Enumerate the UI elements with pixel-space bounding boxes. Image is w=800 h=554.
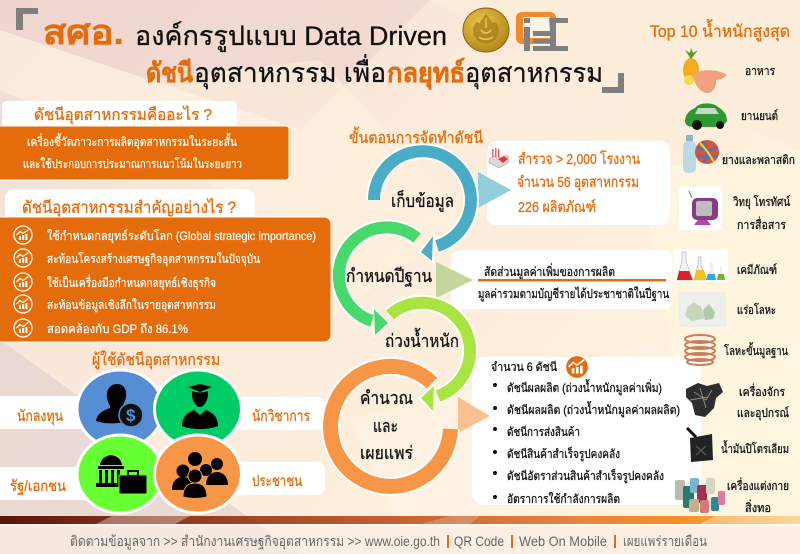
title line two: อุตสาหกรรม	[465, 58, 603, 90]
step 4 ring: calculate and publish	[331, 366, 450, 486]
footer	[0, 516, 800, 554]
panel: index users	[0, 350, 325, 513]
index list: อัตราการใช้กำลังการผลิต	[507, 492, 620, 506]
item: radio television and communication: การสื่อสาร	[737, 216, 786, 232]
item: non-metallic minerals	[679, 292, 776, 327]
title line two: อุตสาหกรรม เพื่อ	[194, 54, 386, 90]
step 4 ring: calculate and publish: เผยแพร่	[360, 443, 413, 463]
list text	[47, 229, 316, 336]
step 1 ring: collect data: เก็บข้อมูล	[391, 189, 454, 212]
step 4 ring: calculate and publish: คำนวณ	[360, 388, 413, 408]
item: rubber and plastics	[683, 135, 795, 173]
user: government and private sector: รัฐ/เอกชน	[10, 478, 66, 495]
formula divider	[478, 279, 666, 282]
list text: ใช้เป็นเครื่องมือกำหนดกลยุทธ์เชิงธุรกิจ	[47, 274, 216, 291]
heading: top 10: Top 10 น้ำหนักสูงสุด	[650, 19, 790, 42]
heading: why it matters	[5, 189, 255, 223]
arrow: pointer to index list	[458, 397, 490, 433]
heading: index process steps: ขั้นตอนการจัดทำดัชนี	[349, 126, 483, 147]
user: academic: นักวิชาการ	[252, 408, 310, 425]
step 2 ring: base year	[339, 227, 432, 338]
survey text: สำรวจ > 2,000 โรงงาน	[518, 150, 640, 168]
arrow: pointer to survey panel	[478, 172, 511, 208]
arrow: pointer to formula panel	[436, 262, 473, 298]
item: apparel and textiles: สิ่งทอ	[745, 499, 771, 515]
index list: ดัชนีผลผลิต (ถ่วงน้ำหนักมูลค่าเพิ่ม)	[507, 379, 662, 396]
panel: why the index matters	[0, 189, 331, 342]
footer bar	[0, 516, 800, 524]
corner bracket: top left	[16, 8, 38, 30]
index list: ดัชนีสินค้าสำเร็จรูปคงคลัง	[507, 446, 620, 462]
orange list block	[0, 217, 331, 342]
icons: bullet charts	[14, 226, 32, 337]
item: machinery and equipment: และอุปกรณ์	[737, 406, 789, 421]
step 1 ring: collect data	[374, 151, 471, 264]
survey text: 226 ผลิตภัณฑ์	[518, 199, 596, 216]
index list	[493, 379, 680, 506]
formula numerator: สัดส่วนมูลค่าเพิ่มของการผลิต	[484, 263, 615, 280]
user: general public: ประชาชน	[252, 473, 302, 490]
item: apparel and textiles: เครื่องแต่งกาย	[727, 477, 789, 493]
panel: what is the index: ดัชนีอุตสาหกรรมคืออะไร ?	[34, 105, 212, 125]
panel: top 10 weights	[650, 19, 795, 515]
corner bracket: bottom right	[602, 73, 624, 93]
title	[16, 8, 624, 93]
heading: what is the index	[2, 101, 237, 129]
panel: what is the index: และใช้ประกอบการประมาณการแนวโน้มในระยะยาว	[23, 157, 242, 171]
item: food	[683, 48, 775, 93]
user: general public	[154, 435, 302, 513]
panel heading: จำนวน 6 ดัชนี	[491, 360, 557, 374]
index list: ดัชนีผลผลิต (ถ่วงน้ำหนักมูลค่าผลผลิต)	[507, 401, 680, 418]
panel: base year formula	[451, 250, 672, 309]
item: basic metals	[685, 335, 788, 365]
step 4 ring: calculate and publish: และ	[373, 416, 398, 436]
panel: why the index matters: ดัชนีอุตสาหกรรมสำคัญอย่างไร ?	[22, 198, 236, 218]
index list: ดัชนีอัตราส่วนสินค้าสำเร็จรูปคงคลัง	[507, 468, 664, 484]
user: investor	[17, 370, 163, 448]
list text: สะท้อนโครงสร้างเศรษฐกิจอุตสาหกรรมในปัจจุบัน	[47, 252, 260, 267]
item: automotive: ยานยนต์	[741, 109, 778, 123]
footer text	[70, 533, 707, 550]
title line two: ดัชนี	[146, 58, 193, 88]
formula denominator: มูลค่ารวมตามบัญชีรายได้ประชาชาติในปีฐาน	[478, 287, 669, 302]
user: investor: นักลงทุน	[17, 408, 63, 426]
icon: chart badge	[565, 355, 589, 379]
label pills	[0, 396, 325, 500]
item: chemicals: เคมีภัณฑ์	[737, 263, 777, 277]
footer text: เผยแพร่รายเดือน	[623, 533, 707, 549]
title agency name: สศอ.	[43, 14, 124, 52]
footer text: ติดตามข้อมูลจาก >> สำนักงานเศรษฐกิจอุตสาหกรรม >> www.oie.go.th	[70, 533, 440, 550]
survey text	[517, 150, 640, 216]
icon: factory	[489, 148, 509, 168]
panel: survey details	[487, 141, 670, 225]
list text: ใช้กำหนดกลยุทธ์ระดับโลก (Global strategic importance)	[47, 229, 316, 244]
footer text: Web On Mobile	[519, 533, 607, 549]
item: radio television and communication	[679, 187, 790, 232]
item: machinery and equipment	[686, 383, 789, 421]
icon: gold seal	[463, 8, 509, 52]
title line two: กลยุทธ์	[387, 57, 465, 90]
item: apparel and textiles	[675, 477, 789, 515]
user: investor: $	[126, 406, 136, 425]
panel: six indices	[472, 355, 701, 506]
title line one: องค์กรรูปแบบ Data Driven	[135, 20, 447, 52]
icon: OIE logo	[516, 12, 568, 51]
step 3 ring: weighting	[385, 303, 470, 414]
footer text: QR Code	[454, 533, 504, 549]
index list: ดัชนีการส่งสินค้า	[507, 425, 580, 439]
item: machinery and equipment: เครื่องจักร	[739, 383, 785, 399]
step 3 ring: weighting: ถ่วงน้ำหนัก	[385, 328, 459, 351]
definition text: เครื่องชี้วัดภาวะการผลิตอุตสาหกรรมในระยะสั้น	[27, 133, 237, 150]
user: academic	[154, 370, 310, 448]
orange definition block	[0, 126, 289, 180]
step 2 ring: base year: กำหนดปีฐาน	[346, 266, 432, 287]
title line two	[146, 54, 603, 90]
list text: สะท้อนข้อมูลเชิงลึกในรายอุตสาหกรรม	[47, 298, 216, 313]
item: non-metallic minerals: แร่อโลหะ	[737, 303, 776, 317]
heading: index users: ผู้ใช้ดัชนีอุตสาหกรรม	[92, 350, 220, 370]
item: petroleum products	[687, 428, 789, 462]
process cycle	[331, 151, 511, 486]
item: food: อาหาร	[745, 64, 775, 78]
survey text: จำนวน 56 อุตสาหกรรม	[517, 174, 639, 192]
panel: what is the index	[0, 101, 289, 180]
user: government and private sector	[10, 435, 163, 513]
list text: สอดคล้องกับ GDP ถึง 86.1%	[47, 322, 188, 336]
item: chemicals	[673, 249, 777, 282]
item: automotive	[685, 103, 778, 130]
